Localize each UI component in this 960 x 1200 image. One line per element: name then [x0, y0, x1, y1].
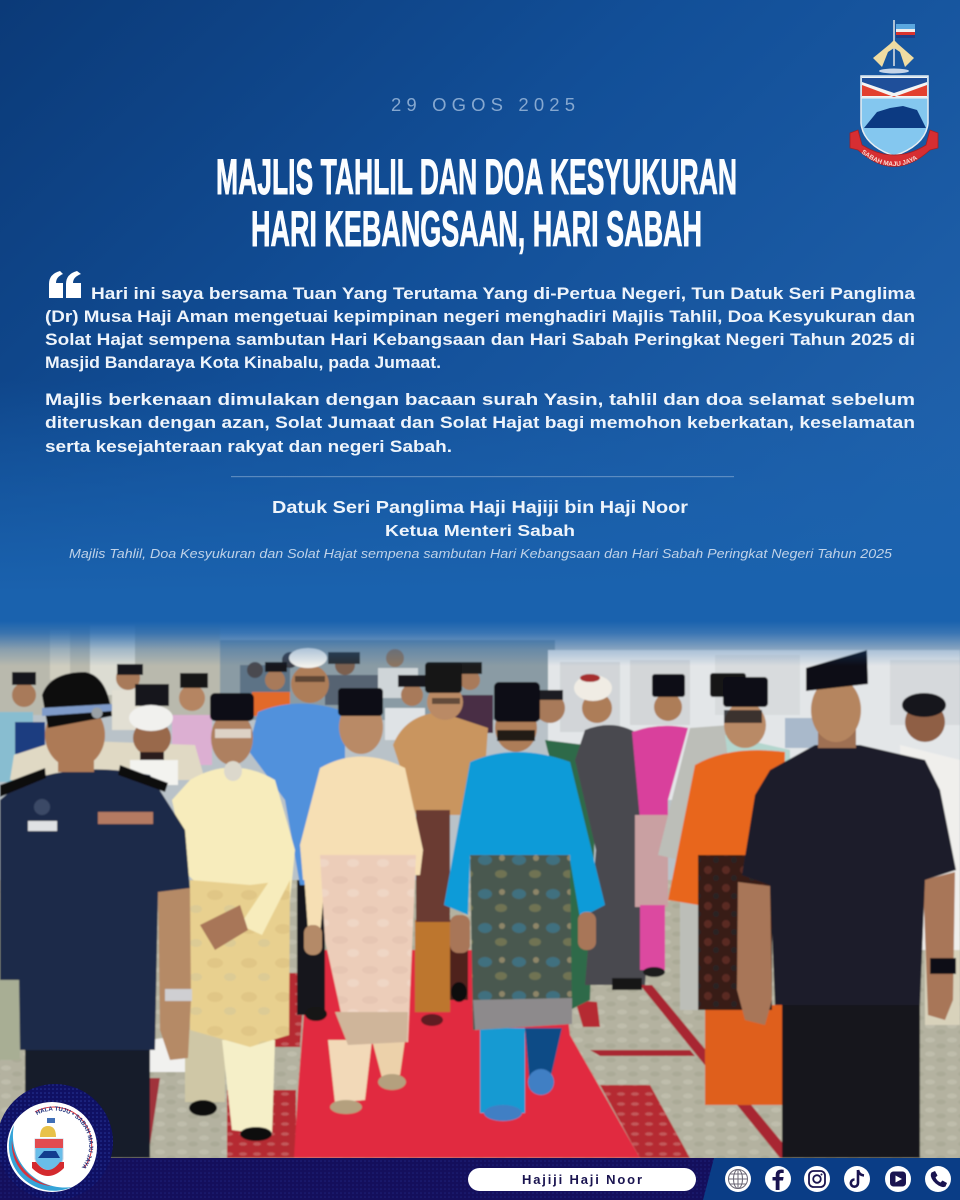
- icon: instagram: [804, 1166, 830, 1192]
- name pill: Hajiji Haji Noor: [522, 1172, 642, 1187]
- man in grey robe: [658, 673, 790, 1010]
- quote text: first paragraph: Hari ini saya bersama Tuan Yang Terutama Yang di-Pertua Negeri, Tun Datuk Seri Panglima: [91, 285, 916, 303]
- quote text: second paragraph: Majlis berkenaan dimulakan dengan bacaan surah Yasin, tahlil dan doa selamat sebelum: [45, 391, 915, 409]
- icon: youtube play: [885, 1166, 911, 1192]
- blue fade from background into photo: [0, 600, 960, 666]
- badge: Hala Tuju Sabah Maju Jaya: [0, 1084, 113, 1198]
- attribution: [69, 497, 893, 561]
- man in brown baju: [393, 662, 488, 1026]
- man in pale peach baju and pink sarong: [300, 688, 423, 1114]
- quote text: second paragraph: [45, 391, 915, 456]
- icon: telephone: [925, 1166, 951, 1192]
- attribution: Majlis Tahlil, Doa Kesyukuran dan Solat Hajat sempena sambutan Hari Kebangsaan dan Hari Sabah Peringkat Negeri Tahun 2025: [69, 546, 893, 561]
- photo: dignitaries walking on red carpet in the mosque: [0, 618, 960, 1165]
- icon: globe: [725, 1166, 751, 1192]
- date: 29 OGOS 2025: [391, 94, 575, 115]
- quote text: second paragraph: serta kesejahteraan rakyat dan negeri Sabah.: [45, 438, 452, 456]
- man in green: [535, 690, 612, 1010]
- mosque wall and back hall: [0, 618, 960, 1018]
- footer bar: [0, 1158, 960, 1200]
- man in blue with white cap: [248, 648, 345, 1021]
- man in pink: [632, 674, 688, 977]
- man in orange: [668, 677, 790, 1105]
- attribution: Datuk Seri Panglima Haji Hajiji bin Haji Noor: [272, 497, 688, 517]
- man in bright blue baju and batik sarong: [444, 682, 605, 1121]
- quote text: first paragraph: Solat Hajat sempena sambutan Hari Kebangsaan dan Hari Sabah Peringkat Negeri Tahun 2025 di: [45, 331, 915, 349]
- quote text: first paragraph: [45, 271, 916, 372]
- icon: tiktok: [844, 1166, 870, 1192]
- quote text: first paragraph: Masjid Bandaraya Kota Kinabalu, pada Jumaat.: [45, 354, 441, 372]
- badge: Hala Tuju Sabah Maju Jaya: HALA TUJU • SABAH MAJU JAYA: [36, 1106, 94, 1168]
- icon: facebook: [765, 1166, 791, 1192]
- icon: opening quotation mark: [49, 271, 81, 298]
- back crowd: [0, 649, 493, 785]
- title: [216, 149, 737, 257]
- quote text: first paragraph: (Dr) Musa Haji Aman mengetuai kepimpinan negeri menghadiri Majlis Tahlil, Doa Kesyukuran dan: [45, 308, 915, 326]
- carpeted floor: [0, 880, 960, 1165]
- man in cream baju and yellow sarong: [150, 693, 295, 1141]
- background: [0, 0, 960, 704]
- man in dark robe with white turban: [574, 674, 655, 990]
- red carpet: [294, 950, 640, 1158]
- attribution: Ketua Menteri Sabah: [385, 523, 575, 540]
- icon: Sabah coat of arms: [850, 20, 938, 167]
- man in white at right: [900, 693, 960, 1025]
- quote text: second paragraph: diteruskan dengan azan, Solat Jumaat dan Solat Hajat bagi memohon keberkatan, keselamatan: [45, 414, 915, 432]
- icon: Sabah coat of arms: SABAH MAJU JAYA: [862, 150, 918, 166]
- name pill: [468, 1168, 696, 1191]
- man in black shirt, right: [737, 650, 956, 1158]
- police officer, left: [0, 672, 192, 1158]
